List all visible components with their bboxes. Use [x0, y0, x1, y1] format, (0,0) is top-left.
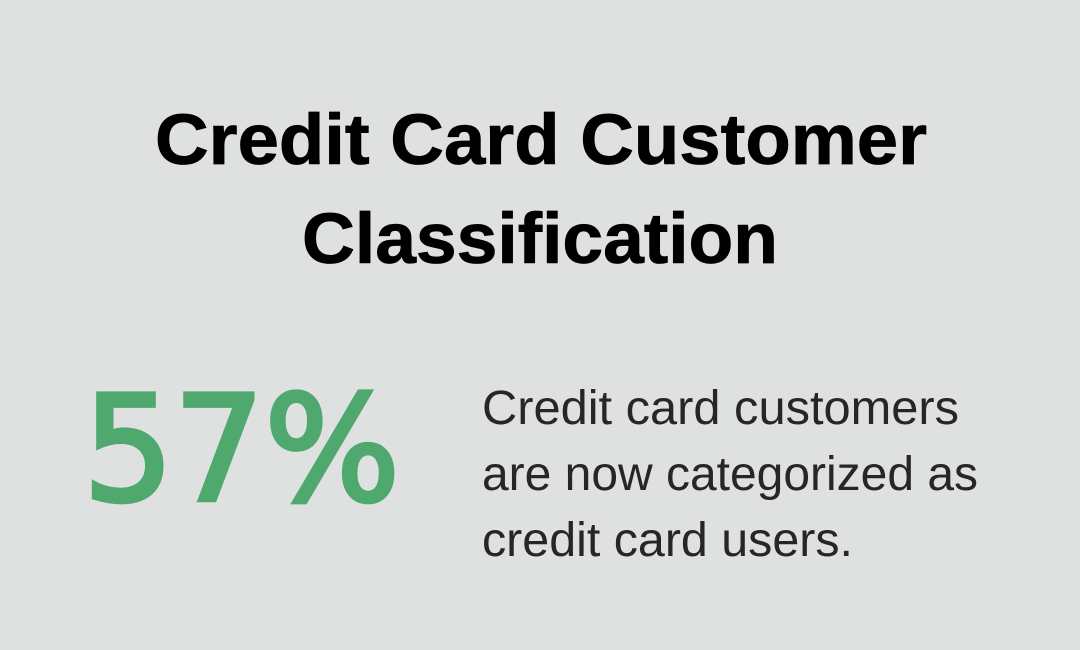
description text: credit card users. [482, 514, 853, 567]
title: Credit Card Customer [155, 101, 927, 180]
title: Classification [302, 200, 778, 279]
title [155, 101, 927, 279]
description text [482, 382, 978, 567]
statistic: 57%: 57% [83, 365, 400, 535]
description text: Credit card customers [482, 382, 959, 435]
description text: are now categorized as [482, 448, 978, 501]
